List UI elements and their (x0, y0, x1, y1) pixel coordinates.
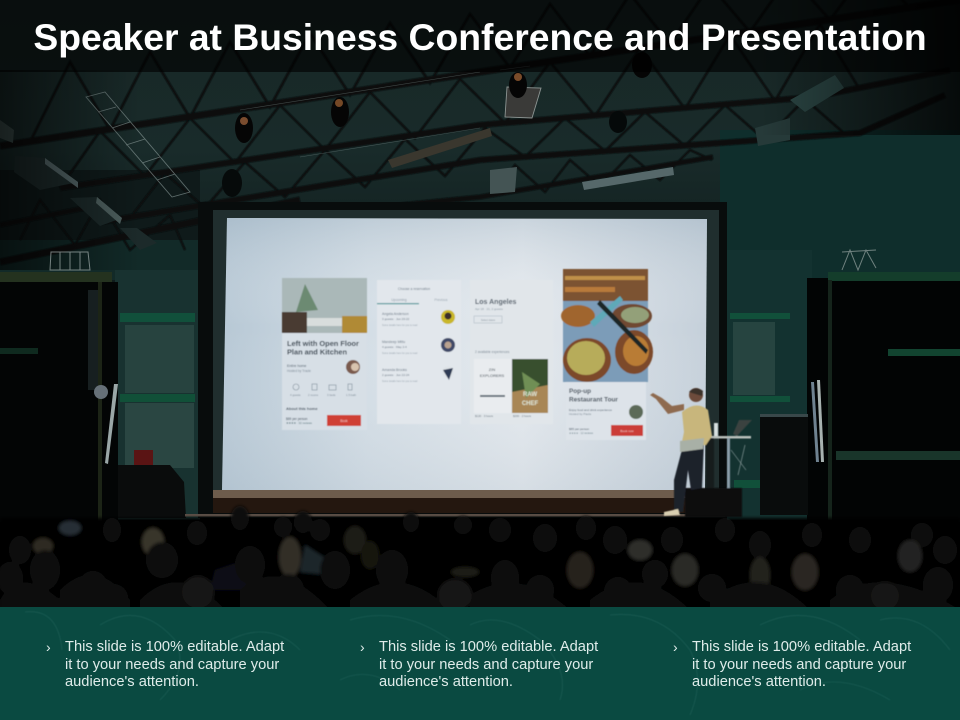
ceiling and back wall (0, 0, 960, 300)
app card: pop-up restaurant tour: Hosted by Paula (569, 412, 591, 416)
app card: loft listing: Plan and Kitchen (287, 348, 347, 356)
app card: choose a reservation: Some details here for you to read (382, 380, 418, 383)
app card: los angeles experiences (470, 280, 553, 424)
app card: los angeles experiences: CHEF (522, 401, 538, 407)
app card: choose a reservation: Choose a reservation (398, 287, 430, 291)
app card: choose a reservation: 3 guests · Jun 20-22 (382, 317, 410, 321)
app card: los angeles experiences: Los Angeles (475, 299, 516, 306)
left equipment block (0, 282, 118, 522)
app card: loft listing: 4 guests (290, 393, 301, 397)
app card: loft listing: 3 beds (327, 393, 336, 397)
bullet text: middle: it to your needs and capture your (379, 656, 593, 672)
roof truss pieces on the blocks (50, 252, 90, 270)
side walls and structures (0, 250, 960, 522)
projection screen frame (198, 202, 727, 518)
app card: loft listing: Entire home (287, 364, 306, 368)
front row (0, 542, 953, 612)
bullet text: left: This slide is 100% editable. Adapt (65, 639, 284, 655)
app card: pop-up restaurant tour: Pop-up (569, 388, 591, 395)
bullet text: right (673, 639, 912, 690)
text: › (360, 639, 365, 655)
app card: loft listing: Left with Open Floor (287, 339, 359, 348)
app card: choose a reservation: Amanda Brooks (382, 368, 407, 372)
app card: loft listing: 2 rooms (308, 393, 319, 397)
app card: loft listing: Book (340, 419, 348, 423)
app card: los angeles experiences: 2 available experiences (475, 350, 510, 354)
app card: choose a reservation: Upcoming (391, 298, 407, 302)
app card: los angeles experiences: ZIN (489, 367, 495, 372)
table and laptop (705, 420, 752, 488)
top title band (0, 0, 960, 72)
app card: pop-up restaurant tour: ★★★★ · 12 reviews (569, 431, 594, 435)
app card: choose a reservation (377, 280, 461, 424)
bottom text band (0, 607, 960, 720)
app card: los angeles experiences: $120 · 3 hours (475, 414, 494, 418)
app card: pop-up restaurant tour: $85 per person (569, 427, 590, 431)
app card: choose a reservation: Some details here for you to read (382, 352, 418, 355)
title: Speaker at Business Conference and Presentation (33, 16, 927, 58)
presenter figure (650, 388, 712, 516)
ceiling trusses (0, 0, 960, 262)
bullet text: right: audience's attention. (692, 674, 826, 690)
app card: choose a reservation: 4 guests · May 2-4 (382, 345, 407, 349)
app card: los angeles experiences: Apr 18 · 21, 2 guests (475, 307, 503, 311)
projection screen (185, 218, 725, 516)
bullet text: left (46, 639, 284, 690)
bullet text: left: audience's attention. (65, 674, 199, 690)
app card: los angeles experiences: Select dates (481, 318, 496, 322)
app card: choose a reservation: 2 guests · Jun 22-24 (382, 373, 410, 377)
app card: los angeles experiences: RAW (523, 392, 537, 398)
app card: choose a reservation: Some details here for you to read (382, 324, 418, 327)
app card: choose a reservation: Mandeep Mittu (382, 340, 405, 344)
app card: pop-up restaurant tour: Enjoy food and drink experience (569, 408, 612, 412)
lit hair and shirts (33, 521, 922, 593)
app card: pop-up restaurant tour: Book now (620, 429, 634, 433)
beam highlights (240, 66, 530, 157)
audience silhouettes (0, 506, 960, 720)
dark falloff at ceiling corners (0, 0, 960, 270)
bullet text: right: it to your needs and capture your (692, 656, 906, 672)
app card: pop-up restaurant tour: Restaurant Tour (569, 396, 618, 404)
text: › (673, 639, 678, 655)
app card: los angeles experiences: $200 · 2 hours (513, 414, 532, 418)
air ducts (0, 75, 844, 250)
bullet text: middle: audience's attention. (379, 674, 513, 690)
app card: loft listing: Hosted by Tracie (287, 369, 311, 373)
shoulders (0, 575, 960, 650)
presenter at table (650, 388, 752, 517)
app card: choose a reservation: Previous (434, 298, 448, 302)
text: › (46, 639, 51, 655)
bullet text: middle (360, 639, 598, 690)
app card: loft listing: 1.5 bath (346, 393, 357, 397)
app card: pop-up restaurant tour (561, 269, 653, 440)
bullet text: right: This slide is 100% editable. Adapt (692, 639, 911, 655)
stage monitor box (685, 488, 742, 517)
right equipment block (807, 278, 960, 522)
app card: loft listing: About this home (286, 406, 318, 411)
app card: loft listing: ★★★★ · 32 reviews (286, 421, 312, 425)
bullet text: left: it to your needs and capture your (65, 656, 279, 672)
rear row (9, 506, 957, 564)
stage lights (222, 52, 652, 197)
app card: loft listing: $69 per person (286, 417, 308, 421)
app card: loft listing (282, 278, 367, 430)
app screens shown on the projector (282, 269, 653, 440)
app card: los angeles experiences: EXPLORERS (480, 373, 505, 378)
bullet text: middle: This slide is 100% editable. Adapt (379, 639, 598, 655)
lighting rig (86, 92, 190, 197)
app card: choose a reservation: Angela Anderson (382, 312, 409, 316)
